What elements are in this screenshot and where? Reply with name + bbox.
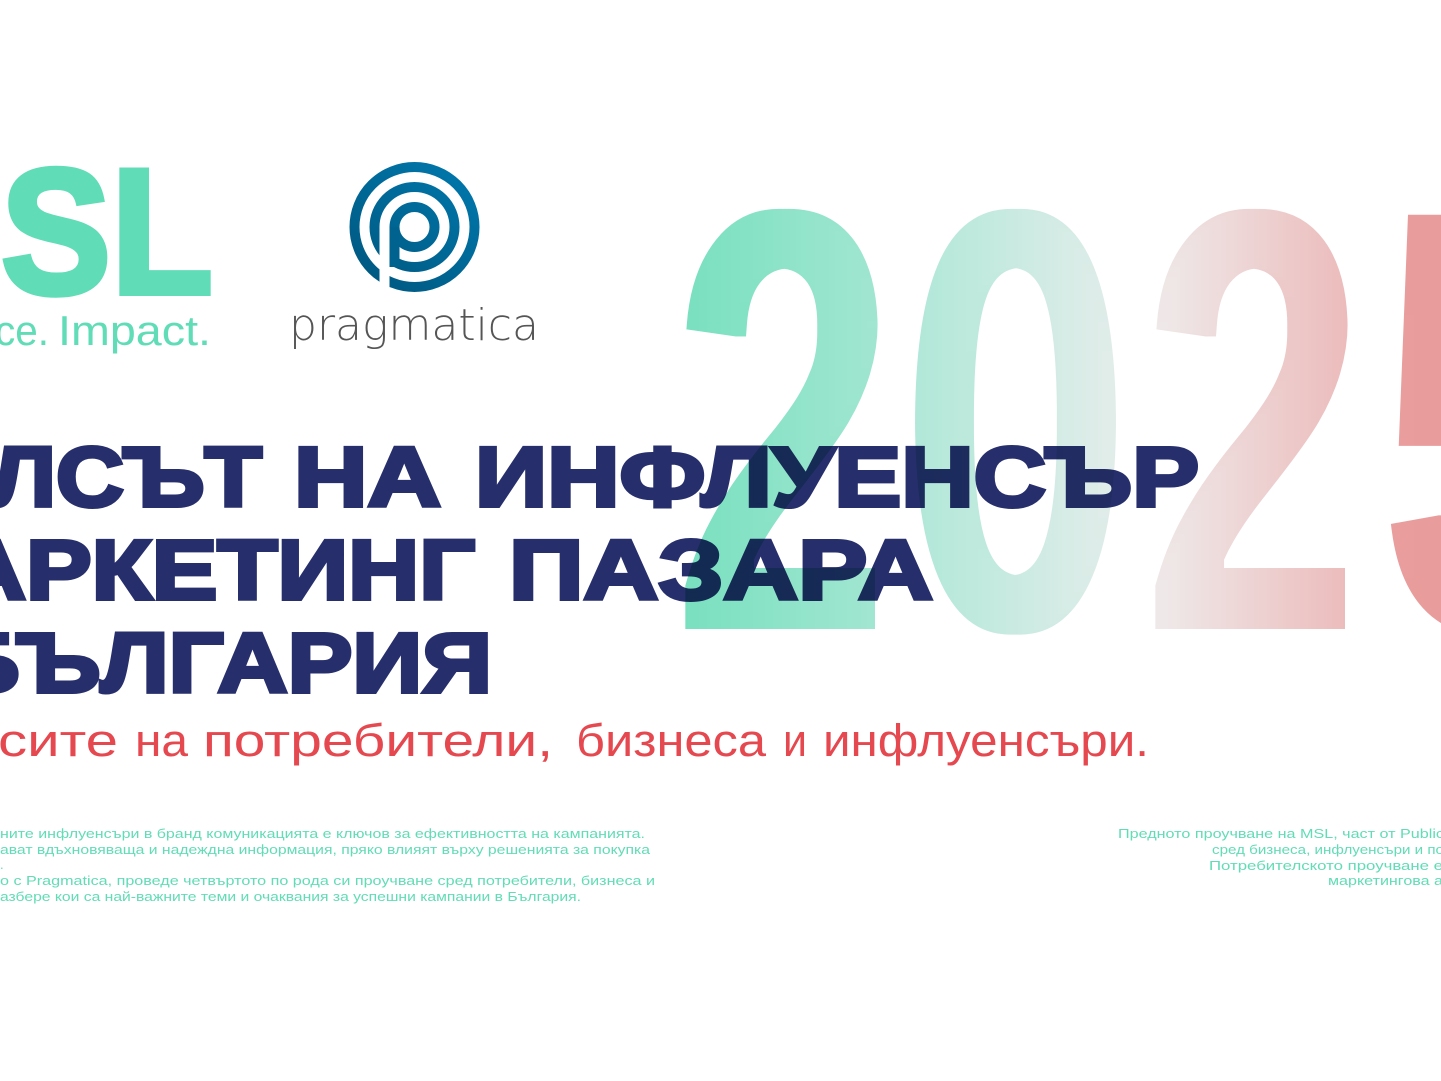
right intro text: Потребителското проучване е <box>1209 858 1441 873</box>
left intro text: о с Pragmatica, проведе четвъртото по рода си проучване сред потребители, бизнеса и <box>0 873 655 888</box>
tagline: Impact. <box>58 307 211 354</box>
left intro text <box>0 826 655 904</box>
big year 2025: 0 <box>914 100 1117 743</box>
big year 2025: 2 <box>680 100 887 743</box>
subtitle: сите <box>0 715 118 766</box>
logo: MSL <box>0 132 213 354</box>
wordmark: pragmatica: pragmatica <box>289 300 539 351</box>
big year 2025 <box>685 208 1441 635</box>
subtitle: инфлуенсъри. <box>823 715 1149 766</box>
letters MSL: L <box>111 132 213 331</box>
logo: pragmatica <box>289 167 539 351</box>
right intro text <box>1118 826 1441 888</box>
subtitle <box>0 715 1149 766</box>
title: ПАЗАРА <box>509 523 933 617</box>
title <box>0 430 1199 710</box>
subtitle: на <box>135 715 189 766</box>
title: НА <box>294 430 441 524</box>
icon: pragmatica spiral <box>354 167 474 287</box>
left intro text: ават вдъхновяваща и надеждна информация, пряко влияят върху решенията за покупка <box>0 842 651 857</box>
left intro text: азбере кои са най-важните теми и очаквания за успешни кампании в България. <box>0 889 581 904</box>
right intro text: сред бизнеса, инфлуенсъри и по <box>1212 842 1441 857</box>
right intro text: маркетингова а <box>1328 873 1441 888</box>
subtitle: потребители, <box>203 715 553 766</box>
right intro text: Предното проучване на MSL, част от Public <box>1118 826 1441 841</box>
tagline <box>0 307 211 354</box>
subtitle: бизнеса <box>576 715 767 766</box>
subtitle: и <box>783 715 807 766</box>
letters MSL <box>0 132 213 331</box>
left intro text: . <box>0 857 4 872</box>
left intro text: ните инфлуенсъри в бранд комуникацията е ключов за ефективността на кампанията. <box>0 826 645 841</box>
title: ИНФЛУЕНСЪР <box>475 430 1199 524</box>
letters MSL: S <box>1 132 111 331</box>
